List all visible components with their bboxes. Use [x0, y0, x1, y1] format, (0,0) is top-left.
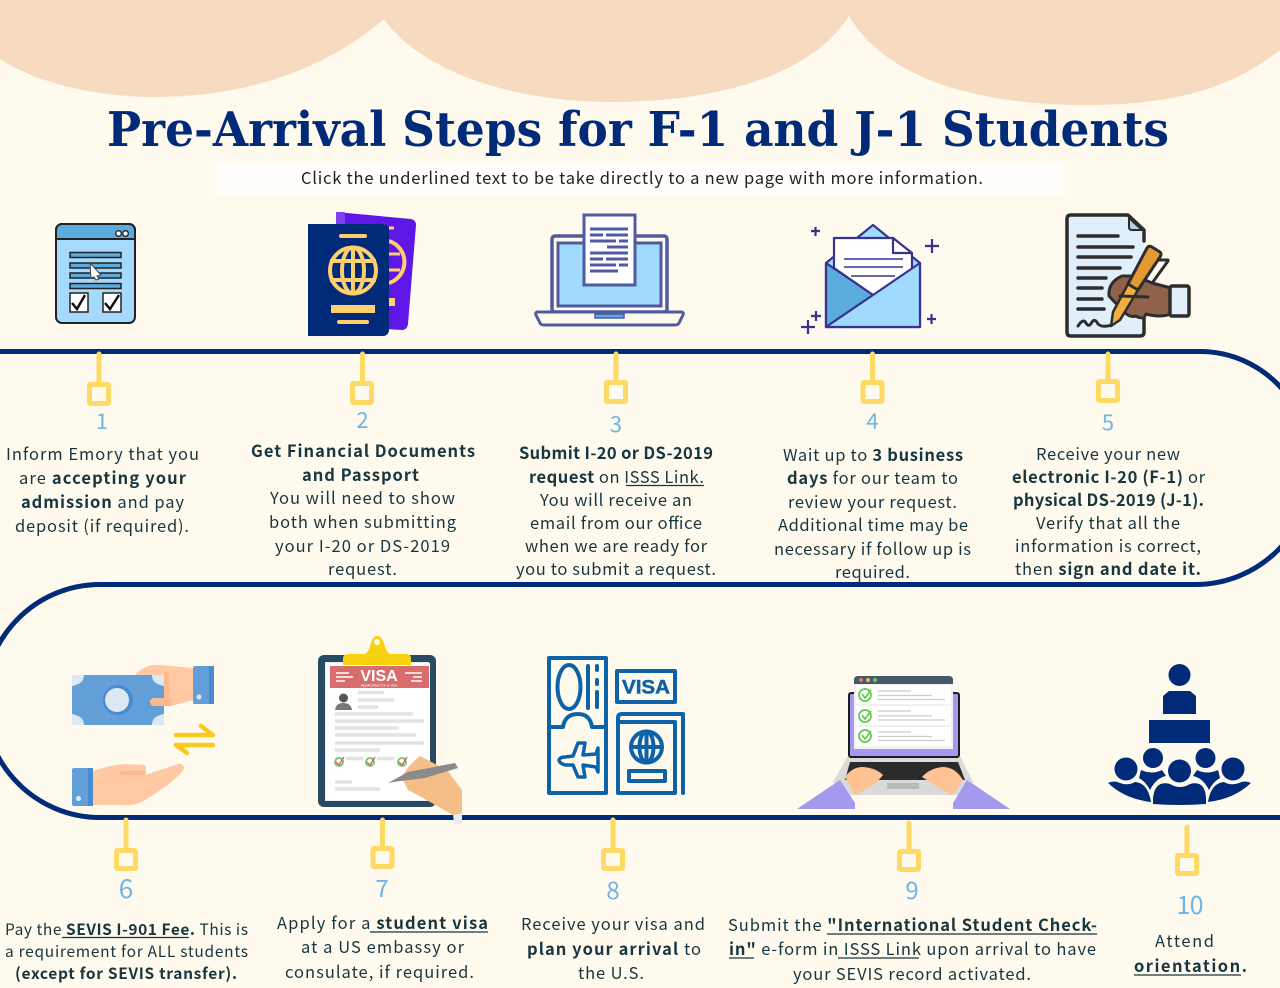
step 2 text [251, 438, 475, 580]
step 2 text: You will need to show [269, 485, 455, 509]
step 4 text: Additional time may be [778, 512, 968, 536]
number 4: 4 [866, 404, 879, 436]
step 10 text: Attend [1155, 928, 1214, 952]
step 7 text: Apply for a student visa [277, 910, 488, 934]
step 3 text: You will receive an [539, 487, 692, 511]
step 1 text: admission and pay [21, 489, 184, 513]
step 10 text: orientation. [1134, 953, 1247, 977]
icon: ticket, visa and passport: VISA [622, 678, 670, 698]
connector 5 [1098, 354, 1118, 400]
number 5: 5 [1102, 405, 1114, 437]
step 2 text: Get Financial Documents [251, 438, 475, 462]
step 1 text: are accepting your [19, 465, 187, 489]
step 5 text [1012, 441, 1206, 580]
step 2 text: both when submitting [269, 509, 457, 533]
step 2 text: and Passport [302, 462, 419, 486]
step 2 text: request. [328, 556, 397, 580]
step 9 [728, 823, 1097, 985]
connector 9 [900, 823, 918, 870]
step 1 text: Inform Emory that you [6, 441, 199, 465]
step 1 text: deposit (if required). [15, 513, 189, 537]
title: Pre-Arrival Steps for F-1 and J-1 Students [107, 102, 1169, 158]
step 3 [516, 354, 716, 580]
step 4 text: review your request. [788, 489, 957, 513]
timeline path [0, 352, 1280, 818]
step 3 text: request on ISSS Link. [529, 464, 704, 488]
step 6 text: Pay the SEVIS I-901 Fee. This is [5, 918, 248, 940]
step 4 text: necessary if follow up is [774, 536, 971, 560]
step 6 [5, 820, 248, 984]
connector 8 [604, 820, 622, 868]
step 4 text [774, 442, 971, 583]
step 2 text: your I-20 or DS-2019 [275, 533, 450, 557]
step 5 text: electronic I-20 (F-1) or [1012, 464, 1206, 488]
icon: online form window [56, 224, 135, 323]
connector 1 [90, 354, 108, 404]
number 3: 3 [610, 407, 622, 439]
step 2 [251, 354, 475, 580]
icon: orientation audience [1108, 664, 1251, 805]
icon: laptop with document [536, 215, 683, 325]
step 7 text [277, 910, 488, 983]
icon: money exchange hands [72, 665, 214, 806]
connector 7 [373, 820, 392, 866]
scalloped header background [0, 0, 1280, 105]
step 5 text: information is correct, [1015, 533, 1201, 557]
connector 4 [863, 354, 882, 402]
step 3 text: email from our office [530, 510, 702, 534]
step 9 text: in" e-form in ISSS Link upon arrival to have [729, 936, 1096, 960]
step 9 text: your SEVIS record activated. [793, 961, 1031, 985]
step 3 text: you to submit a request. [516, 556, 716, 580]
number 2: 2 [356, 403, 369, 435]
number 8: 8 [606, 871, 620, 906]
step 6 text: a requirement for ALL students [5, 940, 248, 962]
subtitle banner [215, 163, 1065, 195]
step 7 text: consulate, if required. [285, 959, 474, 983]
step 8 text: the U.S. [578, 960, 644, 984]
step 1 text [6, 441, 199, 537]
connector 3 [606, 354, 626, 402]
step 8 [521, 820, 705, 984]
step 5 text: Receive your new [1036, 441, 1180, 465]
icon: visa application clipboard [318, 636, 462, 824]
number 7: 7 [375, 869, 389, 904]
icon: laptop with checklist and typing hands [797, 676, 1010, 809]
step 9 text: Submit the "International Student Check- [728, 912, 1097, 936]
step 4 [774, 354, 971, 583]
connector 10 [1178, 827, 1196, 874]
step 10 text [1134, 928, 1247, 977]
connector 6 [116, 820, 136, 868]
step 5 text: Verify that all the [1036, 510, 1180, 534]
step 5 text: then sign and date it. [1015, 556, 1201, 580]
icon: ticket, visa and passport [549, 658, 683, 793]
number 9: 9 [905, 871, 919, 906]
step 8 text: plan your arrival to [527, 936, 701, 960]
step 6 text [5, 918, 248, 984]
icon: document with signing hand [1067, 215, 1189, 336]
connector 2 [352, 354, 372, 402]
step 3 text: when we are ready for [525, 533, 708, 557]
step 3 text [516, 440, 716, 580]
step 4 text: Wait up to 3 business [783, 442, 963, 466]
icon: passports [308, 212, 416, 336]
step 4 text: required. [835, 559, 910, 583]
step 8 text [521, 911, 705, 984]
subtitle banner: Click the underlined text to be take directly to a new page with more information. [301, 165, 983, 189]
step 5 text: physical DS-2019 (J-1). [1013, 487, 1204, 511]
step 4 text: days for our team to [787, 465, 958, 489]
number 6: 6 [119, 869, 133, 906]
icon: visa application clipboard: VISA [360, 668, 398, 685]
step 6 text: (except for SEVIS transfer). [15, 962, 237, 984]
number 1: 1 [96, 404, 108, 436]
step 7 text: at a US embassy or [301, 934, 465, 958]
step 1 [6, 354, 199, 537]
step 3 text: Submit I-20 or DS-2019 [519, 440, 713, 464]
number 10: 10 [1176, 886, 1204, 922]
icon: visa application clipboard: Application for a visa [361, 682, 398, 688]
step 8 text: Receive your visa and [521, 911, 705, 935]
step 7 [277, 820, 488, 983]
icon: open envelope [801, 225, 939, 334]
step 9 text [728, 912, 1097, 985]
step 5 [1012, 354, 1206, 580]
step 10 [1134, 827, 1247, 977]
